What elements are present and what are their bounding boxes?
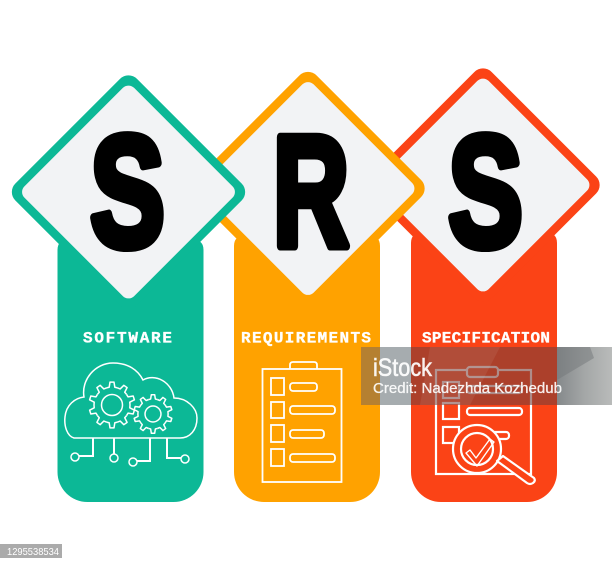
diamond: teal S	[7, 70, 250, 314]
letter: S: S	[90, 104, 165, 281]
icon: cloud with gears	[65, 363, 197, 466]
column: Requirements (orange)	[186, 67, 430, 502]
image id tag: 1295538534	[7, 546, 59, 558]
panel: teal	[58, 240, 204, 502]
watermark band	[361, 347, 612, 405]
label: Specification: SPECIFICATION	[422, 330, 550, 348]
icon: checklist clipboard	[262, 362, 342, 482]
label: Requirements: REQUIREMENTS	[241, 330, 371, 348]
watermark credit: Credit: Nadezhda Kozhedub	[373, 381, 562, 397]
panel: orange	[234, 236, 380, 502]
panel: red	[411, 233, 557, 502]
diamond: red S	[361, 63, 605, 307]
letter: S: S	[448, 104, 523, 281]
column: Software (teal)	[7, 70, 250, 502]
letter: R: R	[273, 104, 349, 280]
column: Specification (red)	[361, 63, 605, 502]
label: Software: SOFTWARE	[83, 330, 172, 348]
icon: clipboard with magnifier	[436, 367, 535, 484]
watermark logo: iStock	[373, 354, 432, 382]
diamond: orange R	[186, 67, 430, 310]
